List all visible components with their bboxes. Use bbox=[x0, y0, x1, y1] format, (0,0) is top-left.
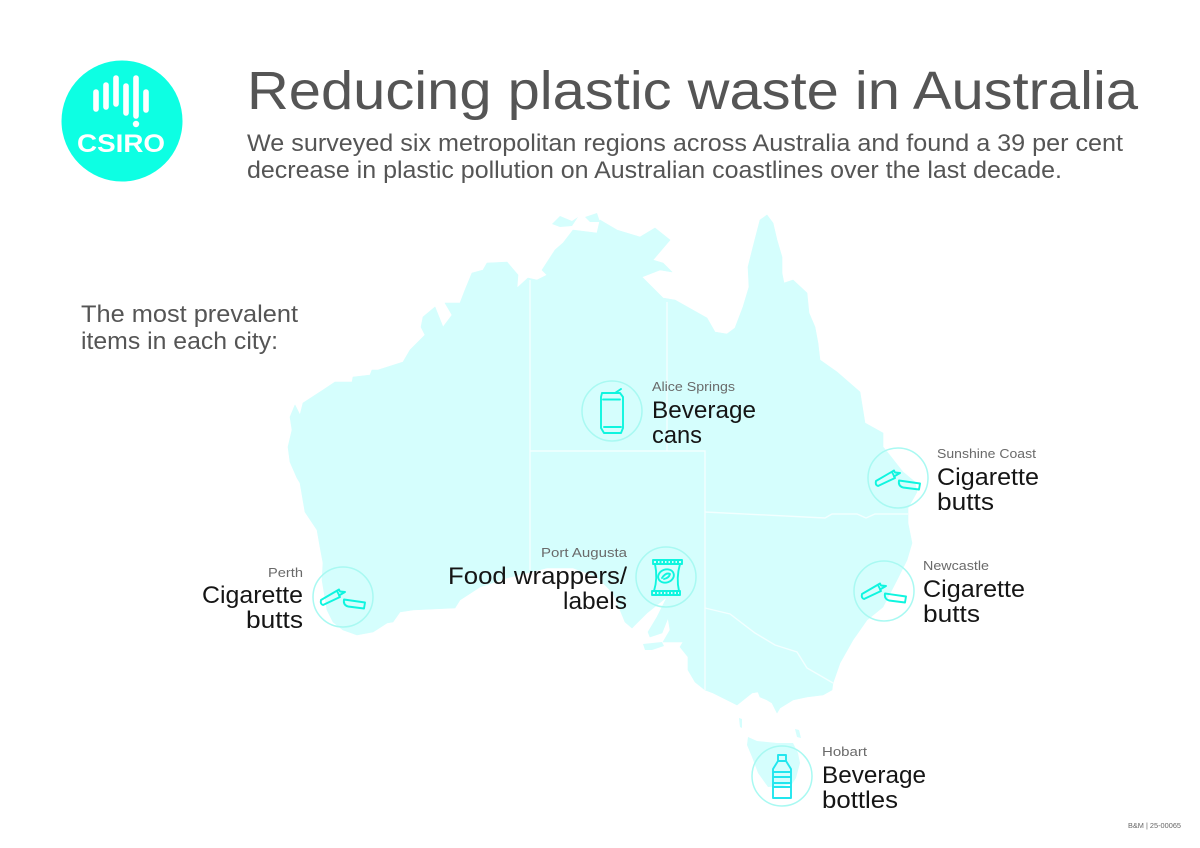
marker: Perth bbox=[202, 565, 373, 634]
footer code: B&M | 25-00065 bbox=[1128, 823, 1181, 830]
marker: Alice Springs: Alice Springs bbox=[652, 379, 736, 394]
marker: Port Augusta: Port Augusta bbox=[541, 545, 628, 560]
subtitle: decrease in plastic pollution on Australian coastlines over the last decade. bbox=[247, 157, 1062, 184]
marker: Newcastle: Newcastle bbox=[923, 558, 989, 573]
marker: Newcastle: Cigarette bbox=[923, 576, 1025, 603]
marker: Alice Springs: Beverage bbox=[652, 397, 756, 424]
marker: Port Augusta: labels bbox=[563, 588, 627, 615]
marker: Perth: Cigarette bbox=[202, 582, 303, 609]
marker: Sunshine Coast: Cigarette bbox=[937, 464, 1039, 491]
marker: Port Augusta bbox=[448, 545, 696, 615]
marker: Hobart: bottles bbox=[822, 787, 898, 814]
marker: Newcastle bbox=[854, 558, 1025, 628]
CSIRO logo: CSIRO bbox=[77, 130, 165, 158]
marker: Perth: butts bbox=[246, 607, 303, 634]
icon: beverage can bbox=[601, 389, 623, 433]
Tiwi islands bbox=[552, 213, 600, 227]
icon: cigarette butts bbox=[321, 590, 365, 608]
Tasmania bbox=[747, 737, 800, 787]
subtitle bbox=[247, 130, 1123, 184]
legend heading bbox=[81, 301, 298, 355]
legend heading: The most prevalent bbox=[81, 301, 298, 328]
Bass Strait islands bbox=[739, 718, 801, 738]
marker: Alice Springs bbox=[582, 379, 756, 449]
marker: Hobart: Beverage bbox=[822, 762, 926, 789]
map of Australia bbox=[288, 213, 917, 787]
marker: Hobart: Hobart bbox=[822, 744, 867, 759]
marker: Port Augusta: Food wrappers/ bbox=[448, 563, 627, 590]
Kangaroo Island bbox=[643, 642, 664, 650]
title: Reducing plastic waste in Australia bbox=[247, 61, 1139, 121]
marker: Perth: Perth bbox=[268, 565, 303, 580]
icon: food wrapper bbox=[652, 560, 682, 595]
marker: Hobart bbox=[752, 744, 926, 814]
marker: Sunshine Coast: Sunshine Coast bbox=[937, 446, 1036, 461]
marker: Sunshine Coast bbox=[868, 446, 1039, 516]
icon: cigarette butts bbox=[862, 584, 906, 602]
subtitle: We surveyed six metropolitan regions across Australia and found a 39 per cent bbox=[247, 130, 1123, 157]
CSIRO logo bbox=[62, 60, 182, 182]
marker: Sunshine Coast: butts bbox=[937, 489, 994, 516]
icon: cigarette butts bbox=[876, 470, 920, 490]
icon: beverage bottle bbox=[773, 755, 791, 798]
mainland bbox=[288, 215, 917, 713]
marker: Alice Springs: cans bbox=[652, 422, 702, 449]
state borders bbox=[530, 280, 908, 690]
legend heading: items in each city: bbox=[81, 328, 278, 355]
marker: Newcastle: butts bbox=[923, 601, 980, 628]
